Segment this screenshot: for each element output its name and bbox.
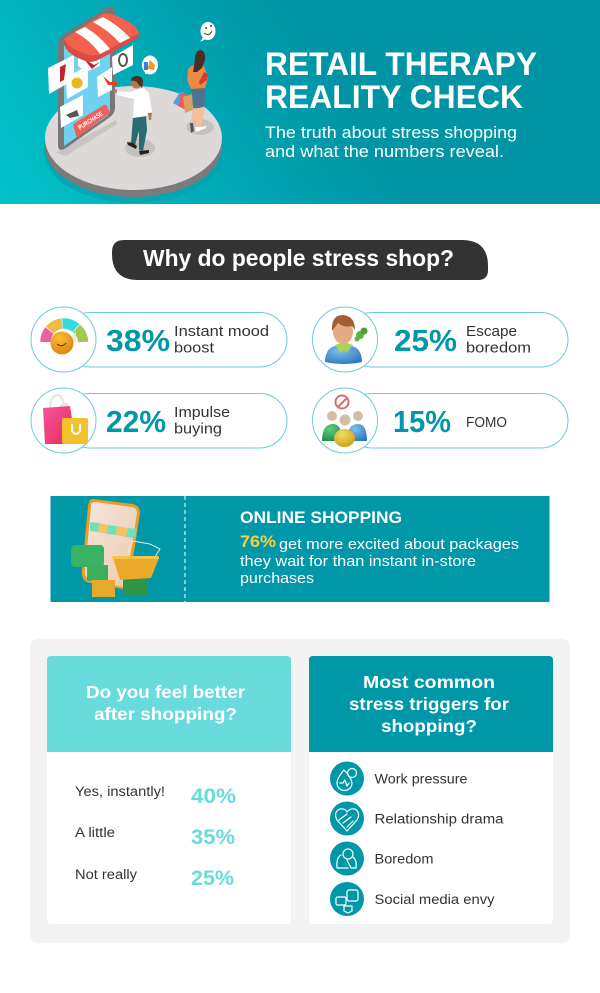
speech bubble: thumbs up (142, 56, 158, 74)
phone storefront: PURCHASE (77, 110, 105, 132)
stat: impulse buying: buying (174, 422, 222, 438)
stat: instant mood boost: boost (174, 340, 214, 356)
row: relationship drama (330, 802, 504, 836)
subtitle: The truth about stress shopping (265, 124, 517, 142)
title: RETAIL THERAPY (265, 46, 537, 82)
row: boredom (330, 842, 434, 876)
card: stress triggers: shopping? (381, 716, 477, 736)
row: a little (75, 825, 235, 849)
icon: phone shop with basket and parcels (71, 499, 160, 597)
title: REALITY CHECK (265, 79, 523, 115)
header banner (0, 0, 600, 204)
row: boredom: Boredom (374, 852, 434, 866)
stat: impulse buying: Impulse (174, 405, 230, 421)
product cards (48, 45, 133, 128)
card: feel better after shopping: Do you feel better (86, 682, 245, 702)
card: stress triggers: Most common (363, 672, 495, 692)
banner text: get more excited about packages (279, 537, 519, 553)
stat: instant mood boost: 38% (106, 323, 170, 358)
icon: shopping bags (43, 395, 88, 444)
card: stress triggers: stress triggers for (349, 694, 509, 714)
speech bubble: smiley (200, 22, 216, 42)
stat: instant mood boost: Instant mood (174, 324, 269, 340)
stat: impulse buying: 22% (106, 404, 166, 439)
card: feel better after shopping (47, 656, 291, 924)
row: a little: 35% (191, 825, 235, 849)
phone storefront (58, 6, 115, 150)
stat: escape boredom: Escape (466, 324, 517, 340)
banner text (240, 532, 519, 587)
title (265, 46, 537, 115)
row: yes instantly: 40% (191, 784, 236, 808)
stat: escape boredom: 25% (394, 323, 457, 358)
banner heading: ONLINE SHOPPING (240, 508, 402, 527)
row: not really: Not really (75, 867, 137, 882)
striped awning (64, 13, 139, 62)
stat: escape boredom (312, 307, 568, 372)
banner text: they wait for than instant in-store (240, 554, 476, 570)
icon: bored person (325, 315, 368, 364)
row: a little: A little (75, 825, 115, 840)
row: relationship drama: Relationship drama (374, 812, 504, 826)
stat: FOMO (312, 388, 568, 453)
bottom panel (30, 639, 570, 943)
row: social media envy: Social media envy (374, 892, 495, 907)
stat: FOMO: FOMO (466, 415, 507, 431)
row: not really: 25% (191, 866, 234, 890)
icon: mood gauge (45, 323, 83, 354)
woman figure with bags (173, 50, 214, 135)
row: social media envy (330, 882, 495, 916)
heading pill (112, 240, 488, 280)
row: work pressure: Work pressure (374, 772, 468, 786)
man figure (113, 76, 155, 157)
subtitle (265, 124, 517, 161)
icon: group with no sign (322, 396, 367, 447)
card: stress triggers (309, 656, 553, 924)
stat: escape boredom: boredom (466, 340, 531, 356)
row: not really (75, 866, 234, 890)
row: yes instantly: Yes, instantly! (75, 784, 165, 799)
subtitle: and what the numbers reveal. (265, 143, 504, 161)
stat: impulse buying (31, 388, 287, 453)
card: feel better after shopping: after shopping? (94, 704, 237, 724)
row: yes instantly (75, 784, 236, 808)
row: work pressure (330, 762, 468, 796)
heading pill: Why do people stress shop? (143, 245, 454, 271)
online shopping banner (50, 496, 550, 602)
banner text: purchases (240, 571, 314, 587)
banner text: 76% (240, 532, 276, 551)
stat: instant mood boost (31, 307, 287, 372)
stat: FOMO: 15% (393, 404, 451, 439)
illustration: shoppers on a storefront phone platform (43, 6, 225, 203)
